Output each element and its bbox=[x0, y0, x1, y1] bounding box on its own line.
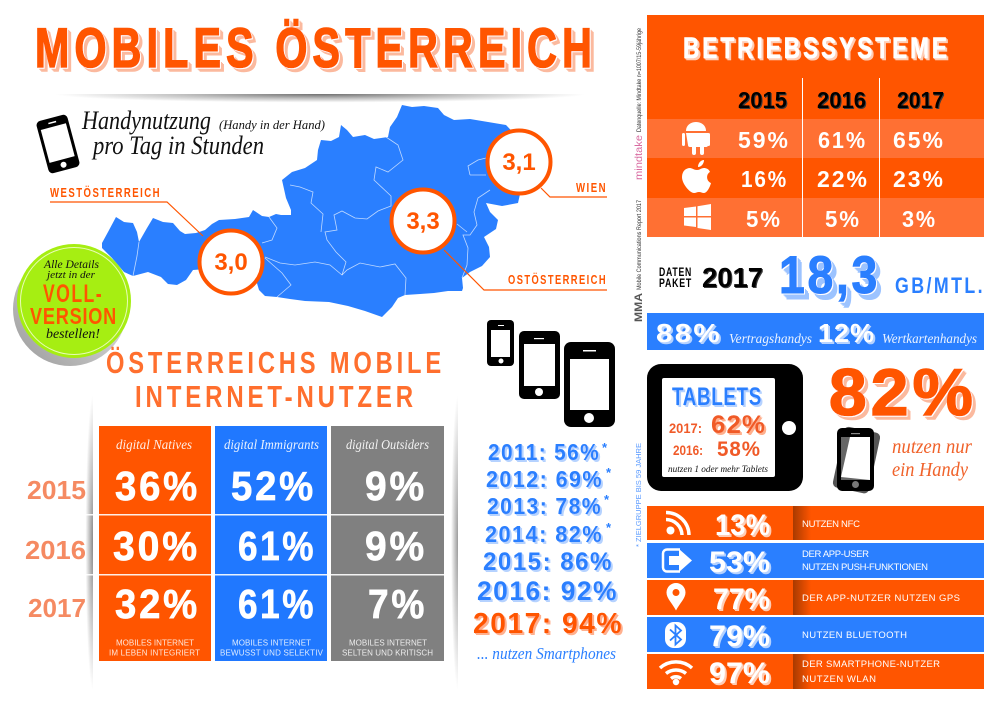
text: nutzen nur ein Handy: nutzen nur bbox=[892, 436, 972, 458]
column: digital Immigrants: BEWUSST UND SELEKTIV bbox=[220, 648, 324, 658]
icon: android bbox=[682, 122, 710, 155]
band: contract vs prepaid bbox=[647, 313, 984, 350]
operating system values bbox=[738, 127, 945, 232]
operating system values: 5% bbox=[825, 206, 861, 232]
data volume: 18,3 bbox=[779, 246, 880, 305]
column: digital Outsiders: 9% bbox=[365, 463, 427, 509]
row: Bluetooth: 79% bbox=[709, 620, 770, 653]
data volume: DATEN bbox=[659, 267, 692, 279]
data volume bbox=[659, 246, 985, 305]
icon: push arrow bbox=[663, 549, 692, 572]
icon: map pin bbox=[666, 583, 686, 610]
value circle: Westösterreich 3,0 bbox=[200, 230, 262, 294]
value circle: Westösterreich 3,0: 3,0 bbox=[214, 249, 248, 276]
column: digital Natives: MOBILES INTERNET bbox=[116, 638, 194, 648]
callout line: Westösterreich bbox=[50, 202, 203, 236]
panel shadows bbox=[78, 395, 458, 690]
row: push bbox=[647, 543, 984, 579]
value circle: Ostösterreich 3,3: 3,3 bbox=[406, 208, 440, 235]
row dividers bbox=[84, 514, 449, 576]
column: digital Immigrants: 52% bbox=[231, 463, 316, 509]
value circle: Ostösterreich 3,3 bbox=[392, 190, 454, 252]
big stat: 82%: 82% bbox=[829, 355, 977, 429]
operating system values: 65% bbox=[893, 127, 945, 153]
badge: Vollversion: VOLL- bbox=[43, 280, 103, 308]
callout line: Wien bbox=[541, 188, 607, 197]
column: digital Natives: 36% bbox=[115, 463, 200, 509]
operating system values: 3% bbox=[902, 206, 937, 232]
heading: Handynutzung: pro Tag in Stunden bbox=[91, 131, 264, 160]
column: digital Natives: 32% bbox=[115, 581, 200, 627]
column: digital Immigrants: 61% bbox=[238, 581, 316, 627]
smartphone usage by year: 2015: 86% bbox=[483, 548, 613, 576]
smartphone usage by year: 2013: 78% bbox=[487, 493, 602, 519]
icon: tilted phone bbox=[36, 114, 80, 174]
heading: Handynutzung: Handynutzung bbox=[81, 106, 211, 135]
row: WLAN: NUTZEN WLAN bbox=[802, 674, 876, 685]
row: push: DER APP-USER bbox=[802, 549, 869, 560]
tablet graphic bbox=[647, 364, 803, 491]
smartphone usage by year: 2014: 82% bbox=[485, 521, 603, 547]
badge: Vollversion: jetzt in der bbox=[45, 269, 96, 281]
year labels: 2015 bbox=[27, 475, 86, 505]
column: digital Natives: IM LEBEN INTEGRIERT bbox=[109, 648, 200, 658]
vertical source notes: mindtake bbox=[634, 135, 645, 180]
heading: Österreichs mobile Internet-Nutzer bbox=[106, 345, 445, 414]
year labels bbox=[25, 475, 86, 623]
title: MOBILES ÖSTERREICH bbox=[35, 16, 597, 79]
badge: Vollversion: bestellen! bbox=[46, 327, 100, 342]
heading: Österreichs mobile Internet-Nutzer: INTERNET-NUTZER bbox=[135, 379, 417, 414]
value circle: Wien 3,1 bbox=[488, 130, 550, 194]
tablet graphic: TABLETS bbox=[672, 383, 762, 411]
table header years: 2016 bbox=[817, 87, 866, 113]
badge: Vollversion: VERSION bbox=[30, 303, 117, 329]
table header years: 2015 bbox=[738, 87, 787, 113]
column: digital Outsiders: SELTEN UND KRITISCH bbox=[342, 648, 433, 658]
label: Westösterreich: WESTÖSTERREICH bbox=[50, 185, 161, 200]
header shadow bbox=[55, 94, 586, 111]
vertical source notes: MMA bbox=[633, 293, 645, 322]
column: digital Natives: 30% bbox=[113, 523, 200, 569]
table header years: 2017 bbox=[897, 87, 944, 113]
row: NFC: 13% bbox=[715, 509, 770, 542]
tablet graphic: 62% bbox=[711, 411, 766, 439]
icon: apple bbox=[682, 160, 711, 193]
heading: Österreichs mobile Internet-Nutzer: ÖSTERREICHS MOBILE bbox=[106, 345, 445, 380]
icon: phone with shadow bbox=[832, 426, 881, 494]
tablet graphic: nutzen 1 oder mehr Tablets bbox=[668, 464, 769, 474]
badge: Vollversion: Alle Details bbox=[43, 257, 99, 271]
vertical source notes bbox=[633, 28, 645, 547]
column: digital Natives bbox=[99, 426, 211, 661]
heading: Handynutzung bbox=[81, 106, 325, 160]
operating system values: 23% bbox=[893, 166, 945, 192]
column: digital Immigrants: 61% bbox=[238, 523, 316, 569]
row: Bluetooth: NUTZEN BLUETOOTH bbox=[802, 630, 907, 641]
column: digital Immigrants bbox=[215, 426, 327, 661]
smartphone usage by year: * bbox=[602, 440, 608, 455]
vertical source notes: * ZIELGRUPPE BIS 59 JAHRE bbox=[636, 443, 643, 547]
label: Wien: WIEN bbox=[576, 180, 607, 195]
row: NFC: NUTZEN NFC bbox=[802, 519, 860, 530]
vertical source notes: Datenquelle: Mindtake n=1007/15-59jährige bbox=[636, 28, 643, 132]
smartphone usage by year: 2011: 56% bbox=[488, 439, 600, 465]
operating system values: 5% bbox=[746, 206, 782, 232]
icon: bluetooth bbox=[665, 622, 686, 648]
band: contract vs prepaid: Vertragshandys bbox=[729, 332, 813, 347]
smartphone usage by year: * bbox=[606, 520, 612, 535]
column: digital Outsiders: 9% bbox=[365, 523, 427, 569]
data volume: PAKET bbox=[659, 278, 692, 290]
column: digital Outsiders: digital Outsiders bbox=[346, 438, 429, 453]
band: contract vs prepaid: Wertkartenhandys bbox=[882, 332, 978, 347]
column: digital Outsiders: MOBILES INTERNET bbox=[349, 638, 427, 648]
band: contract vs prepaid: 12% bbox=[818, 318, 875, 348]
operating system values: 22% bbox=[817, 166, 869, 192]
smartphone usage by year: 2016: 92% bbox=[477, 576, 618, 606]
row: GPS: 77% bbox=[713, 583, 770, 616]
row: NFC bbox=[647, 506, 984, 542]
year labels: 2016 bbox=[25, 535, 86, 565]
heading: Handynutzung: (Handy in der Hand) bbox=[219, 117, 325, 132]
column: digital Immigrants: digital Immigrants bbox=[224, 438, 319, 453]
tablet graphic: 2016: bbox=[673, 442, 703, 458]
vertical source notes: Mobile Communications Report 2017 bbox=[636, 200, 643, 290]
row: Bluetooth bbox=[647, 617, 984, 653]
table header years bbox=[738, 87, 944, 113]
year labels: 2017 bbox=[28, 593, 86, 623]
operating system values: 61% bbox=[818, 127, 867, 153]
column: digital Natives: digital Natives bbox=[116, 438, 193, 453]
icon: wifi bbox=[660, 662, 692, 684]
data volume: 2017 bbox=[702, 262, 763, 293]
text: nutzen nur ein Handy: ein Handy bbox=[892, 459, 968, 481]
label: Ostösterreich: OSTÖSTERREICH bbox=[508, 272, 607, 287]
smartphone usage by year: 2017: 94% bbox=[473, 608, 623, 640]
smartphone usage by year: ... nutzen Smartphones bbox=[477, 644, 616, 663]
column: digital Immigrants: MOBILES INTERNET bbox=[232, 638, 311, 648]
row: WLAN: 97% bbox=[709, 657, 770, 690]
operating system values: 16% bbox=[741, 166, 788, 192]
value circle: Wien 3,1: 3,1 bbox=[502, 149, 536, 176]
row: push: 53% bbox=[709, 546, 770, 579]
icons: three smartphones bbox=[487, 320, 615, 427]
smartphone usage by year: * bbox=[604, 492, 610, 507]
row: GPS bbox=[647, 580, 984, 616]
map: state borders bbox=[133, 137, 490, 297]
column: digital Outsiders bbox=[331, 426, 444, 661]
callout line: Ostösterreich bbox=[444, 250, 607, 290]
tablet graphic: 2017: bbox=[669, 420, 702, 436]
row: WLAN bbox=[647, 654, 984, 690]
smartphone usage by year bbox=[473, 439, 623, 663]
column: digital Outsiders: 7% bbox=[368, 581, 427, 627]
band: contract vs prepaid: 88% bbox=[656, 318, 722, 348]
smartphone usage by year: 2012: 69% bbox=[486, 466, 603, 492]
text: nutzen nur ein Handy bbox=[892, 436, 972, 481]
row: push: NUTZEN PUSH-FUNKTIONEN bbox=[802, 562, 928, 573]
icon: windows bbox=[684, 204, 711, 230]
tablet graphic: 58% bbox=[717, 438, 761, 461]
row: WLAN: DER SMARTPHONE-NUTZER bbox=[802, 659, 940, 670]
row: GPS: DER APP-NUTZER NUTZEN GPS bbox=[802, 593, 960, 604]
map: Austria bbox=[102, 105, 530, 317]
operating system values: 59% bbox=[738, 127, 790, 153]
icon: rss bbox=[666, 512, 689, 535]
panel: Betriebssysteme bbox=[647, 15, 984, 237]
badge: Vollversion bbox=[13, 244, 131, 366]
smartphone usage by year: * bbox=[606, 465, 612, 480]
